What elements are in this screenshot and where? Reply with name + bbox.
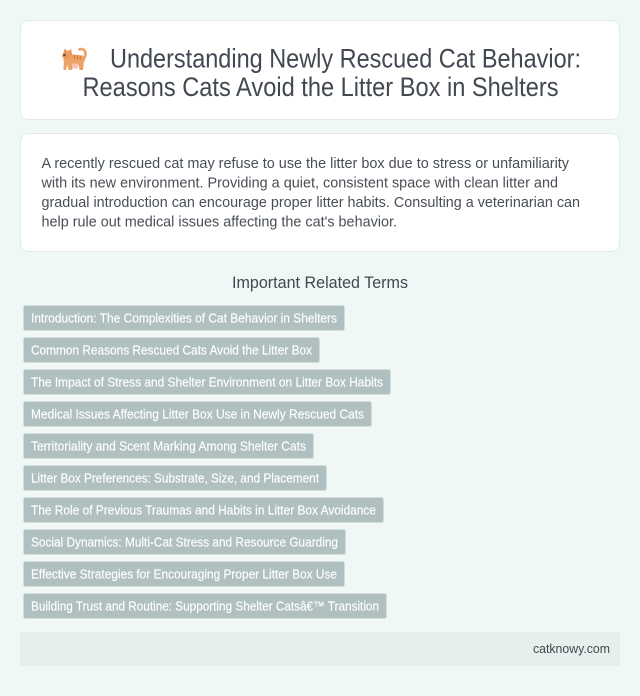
tag 9 <box>24 562 344 586</box>
tag 7: The Role of Previous Traumas and Habits in Litter Box Avoidance <box>31 502 376 518</box>
tag 5 <box>24 434 314 458</box>
description text <box>41 155 580 230</box>
tag 8 <box>24 530 346 554</box>
footer source text: catknowy.com <box>533 641 610 656</box>
tag 10 <box>24 594 386 618</box>
tag 1 <box>24 306 344 330</box>
list of term tags <box>24 306 390 618</box>
tag 7 <box>24 498 384 522</box>
title line 1: Understanding Newly Rescued Cat Behavior: <box>110 44 581 74</box>
tag 2 <box>24 338 320 362</box>
tag 4 <box>24 402 372 426</box>
tag 4: Medical Issues Affecting Litter Box Use in Newly Rescued Cats <box>31 406 364 422</box>
description text: A recently rescued cat may refuse to use the litter box due to stress or unfamiliarity <box>42 155 569 172</box>
tag 1: Introduction: The Complexities of Cat Behavior in Shelters <box>31 310 337 326</box>
tag 6: Litter Box Preferences: Substrate, Size, and Placement <box>31 470 319 486</box>
panel: description card <box>20 134 620 252</box>
description text: help rule out medical issues affecting the cat's behavior. <box>42 214 397 230</box>
panel: title card <box>20 20 620 120</box>
tag 5: Territoriality and Scent Marking Among Shelter Cats <box>31 438 306 454</box>
title line 2: Reasons Cats Avoid the Litter Box in Shelters <box>82 72 558 102</box>
heading: important related terms: Important Related Terms <box>232 274 408 292</box>
tag 8: Social Dynamics: Multi-Cat Stress and Resource Guarding <box>31 534 338 550</box>
tag 9: Effective Strategies for Encouraging Proper Litter Box Use <box>31 566 337 582</box>
tag 6 <box>24 466 326 490</box>
tag 10: Building Trust and Routine: Supporting Shelter Catsâ€™ Transition <box>31 598 379 614</box>
footer <box>20 632 620 666</box>
tag 3 <box>24 370 390 394</box>
tag 3: The Impact of Stress and Shelter Environment on Litter Box Habits <box>31 374 383 390</box>
icon: cat <box>62 48 86 70</box>
description text: with its new environment. Providing a quiet, consistent space with clean litter and <box>41 174 558 192</box>
tag 2: Common Reasons Rescued Cats Avoid the Litter Box <box>31 342 312 358</box>
description text: gradual introduction can encourage proper litter habits. Consulting a veterinarian can <box>42 194 580 211</box>
